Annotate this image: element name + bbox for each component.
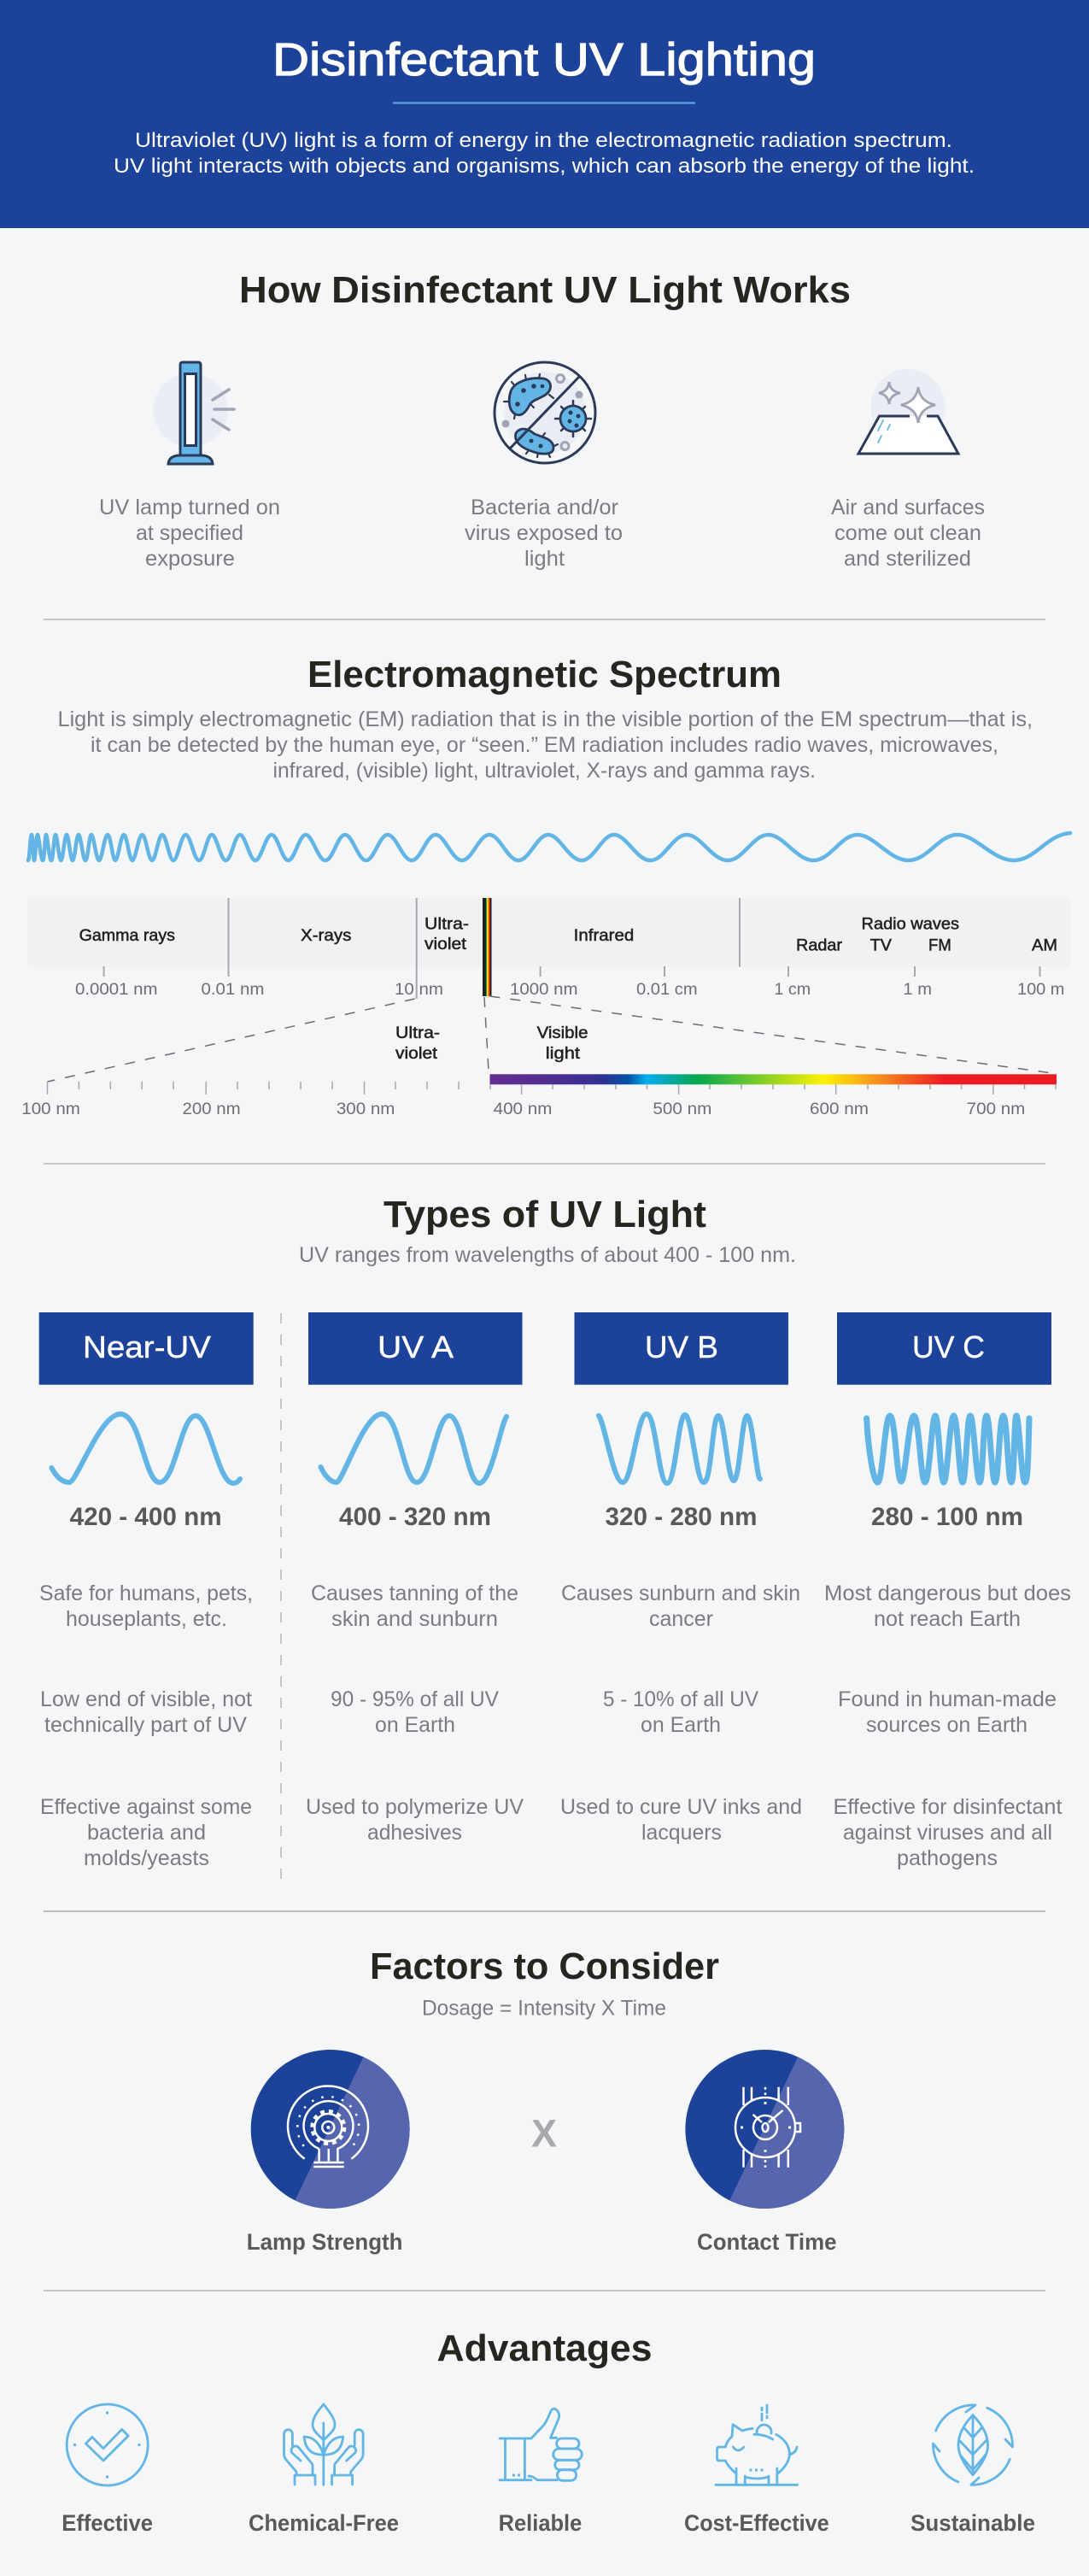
icon: UV lamp (153, 362, 234, 464)
column: UV C: pathogens (897, 1846, 998, 1870)
band labels: Radar (796, 937, 843, 955)
wavelength scale: 100 m (1017, 981, 1064, 999)
label: cost-effective: Cost-Effective (684, 2510, 829, 2536)
nm ruler: 500 nm (653, 1100, 711, 1118)
caption: bacteria: light (524, 547, 565, 571)
caption: bacteria: Bacteria and/or (471, 496, 618, 519)
label: contact time: Contact Time (697, 2229, 837, 2255)
header banner (0, 0, 1089, 228)
column: UV C: against viruses and all (843, 1821, 1052, 1845)
caption: bacteria: virus exposed to (465, 521, 623, 545)
dosage formula: Dosage = Intensity X Time (422, 1996, 666, 2020)
nm ruler: 100 nm (21, 1100, 80, 1118)
description: it can be detected by the human eye, or “seen.” EM radiation includes radio waves, microwaves, (91, 733, 998, 757)
description: infrared, (visible) light, ultraviolet, X-rays and gamma rays. (273, 759, 816, 783)
wavelength scale: 1 cm (774, 981, 811, 999)
visible light stripe (483, 898, 492, 996)
wave graphic (28, 833, 1070, 860)
heading: Electromagnetic Spectrum (307, 654, 782, 695)
band labels: FM (928, 937, 951, 955)
description (58, 707, 1033, 783)
caption: bacteria (465, 496, 623, 571)
column: UV C: Most dangerous but does (824, 1581, 1071, 1605)
column: UV B: Used to cure UV inks and (560, 1795, 802, 1819)
nm ruler: 700 nm (967, 1100, 1025, 1118)
zoomed labels: Visible (537, 1024, 588, 1042)
icon: sustainable leaf and arrows (933, 2405, 1012, 2485)
column: Near-UV: bacteria and (87, 1821, 206, 1845)
wavelength scale: 10 nm (395, 981, 443, 999)
column: Near-UV: Low end of visible, not (40, 1687, 252, 1711)
icon: reliable thumbs up (500, 2409, 582, 2480)
nm ruler: 300 nm (337, 1100, 395, 1118)
caption: surfaces: Air and surfaces (831, 496, 985, 519)
column: Near-UV: technically part of UV (44, 1713, 247, 1737)
spectrum band (28, 898, 1070, 999)
column: UV C: 280 - 100 nm (871, 1503, 1023, 1531)
section: factors to consider (247, 1945, 844, 2255)
column: UV A: skin and sunburn (331, 1607, 498, 1631)
section: types of UV light (39, 1194, 1071, 1880)
zoomed labels (395, 1024, 588, 1063)
zoomed labels: light (546, 1045, 581, 1063)
band labels: TV (870, 937, 892, 955)
column: Near-UV: molds/yeasts (84, 1846, 209, 1870)
column: UV A: UV A (378, 1329, 454, 1364)
caption: lamp: UV lamp turned on (99, 496, 280, 519)
column: Near-UV: Effective against some (40, 1795, 252, 1819)
column: UV B (560, 1312, 802, 1845)
column: UV C: Found in human-made (838, 1687, 1057, 1711)
column: Near-UV: Near-UV (83, 1329, 211, 1364)
column: Near-UV (39, 1312, 254, 1870)
description: Light is simply electromagnetic (EM) radiation that is in the visible portion of the EM spectrum—that is, (58, 707, 1033, 731)
multiply sign: X (531, 2112, 557, 2155)
band labels: Radio waves (861, 916, 959, 934)
column: UV A (306, 1312, 524, 1845)
icon: cost-effective piggy bank (716, 2405, 798, 2485)
band labels: violet (424, 936, 467, 954)
band labels: Ultra- (424, 916, 469, 934)
nm ruler: 600 nm (810, 1100, 869, 1118)
column: UV B: lacquers (641, 1821, 722, 1845)
wavelength scale (75, 981, 1064, 999)
heading: Types of UV Light (383, 1194, 706, 1235)
wavelength scale: 0.0001 nm (75, 981, 157, 999)
column: Near-UV: Safe for humans, pets, (39, 1581, 253, 1605)
column: UV A: on Earth (375, 1713, 455, 1737)
label: chemical-free: Chemical-Free (249, 2510, 399, 2536)
wavelength scale: 0.01 nm (202, 981, 264, 999)
column: UV C: sources on Earth (866, 1713, 1028, 1737)
label: effective: Effective (61, 2510, 153, 2536)
band labels: AM (1032, 937, 1057, 955)
column: UV B: cancer (649, 1607, 713, 1631)
title: Disinfectant UV Lighting (272, 34, 816, 85)
icon: bacteria and virus (495, 362, 595, 463)
band labels (79, 916, 1057, 955)
heading: How Disinfectant UV Light Works (239, 269, 851, 311)
column: UV B: on Earth (641, 1713, 721, 1737)
intro text: Ultraviolet (UV) light is a form of energy in the electromagnetic radiation spectrum. (135, 129, 952, 152)
column: UV C: not reach Earth (874, 1607, 1021, 1631)
column: Near-UV: houseplants, etc. (66, 1607, 227, 1631)
wavelength scale: 1000 nm (510, 981, 578, 999)
nm ruler (21, 1082, 1056, 1118)
intro text (114, 129, 975, 178)
intro text: UV light interacts with objects and organisms, which can absorb the energy of the light. (114, 155, 975, 178)
heading: Factors to Consider (370, 1945, 719, 1987)
caption: surfaces: and sterilized (844, 547, 971, 571)
icon: lamp strength (251, 2050, 410, 2209)
caption: surfaces (831, 496, 985, 571)
icon: effective check (67, 2404, 148, 2485)
heading: Advantages (437, 2327, 653, 2369)
icon: chemical-free hands and plant (284, 2404, 363, 2485)
column: UV B: 320 - 280 nm (605, 1503, 757, 1531)
caption: lamp: exposure (145, 547, 235, 571)
column: UV B: 5 - 10% of all UV (603, 1687, 758, 1711)
label: lamp strength: Lamp Strength (247, 2229, 403, 2255)
column: UV A: Causes tanning of the (311, 1581, 518, 1605)
caption: lamp (99, 496, 280, 571)
label: reliable: Reliable (499, 2510, 582, 2536)
column: UV B: UV B (645, 1329, 718, 1364)
section: how disinfectant UV light works (99, 269, 985, 571)
wavelength scale: 0.01 cm (636, 981, 698, 999)
nm ruler: 400 nm (494, 1100, 552, 1118)
icon: clean surface (858, 369, 958, 454)
zoomed labels: violet (395, 1045, 438, 1063)
section: advantages (61, 2327, 1035, 2536)
band labels: X-rays (301, 927, 351, 945)
column: UV B: Causes sunburn and skin (561, 1581, 800, 1605)
column: UV A: Used to polymerize UV (306, 1795, 524, 1819)
caption: surfaces: come out clean (834, 521, 981, 545)
column: UV A: adhesives (367, 1821, 462, 1845)
caption: lamp: at specified (136, 521, 243, 545)
column: UV C (824, 1312, 1071, 1870)
column: UV A: 90 - 95% of all UV (331, 1687, 499, 1711)
band labels: Infrared (574, 927, 634, 945)
zoomed labels: Ultra- (395, 1024, 440, 1042)
wavelength scale: 1 m (903, 981, 932, 999)
icon: contact time (685, 2050, 844, 2209)
nm ruler: 200 nm (183, 1100, 241, 1118)
column: UV C: Effective for disinfectant (834, 1795, 1063, 1819)
visible light gradient bar (490, 1074, 1057, 1084)
section: electromagnetic spectrum (21, 654, 1070, 1118)
column: UV A: 400 - 320 nm (339, 1503, 491, 1531)
column: UV C: UV C (912, 1329, 985, 1364)
column: Near-UV: 420 - 400 nm (70, 1503, 222, 1531)
label: sustainable: Sustainable (910, 2510, 1035, 2536)
band labels: Gamma rays (79, 927, 175, 945)
subheading: UV ranges from wavelengths of about 400 - 100 nm. (299, 1243, 796, 1267)
